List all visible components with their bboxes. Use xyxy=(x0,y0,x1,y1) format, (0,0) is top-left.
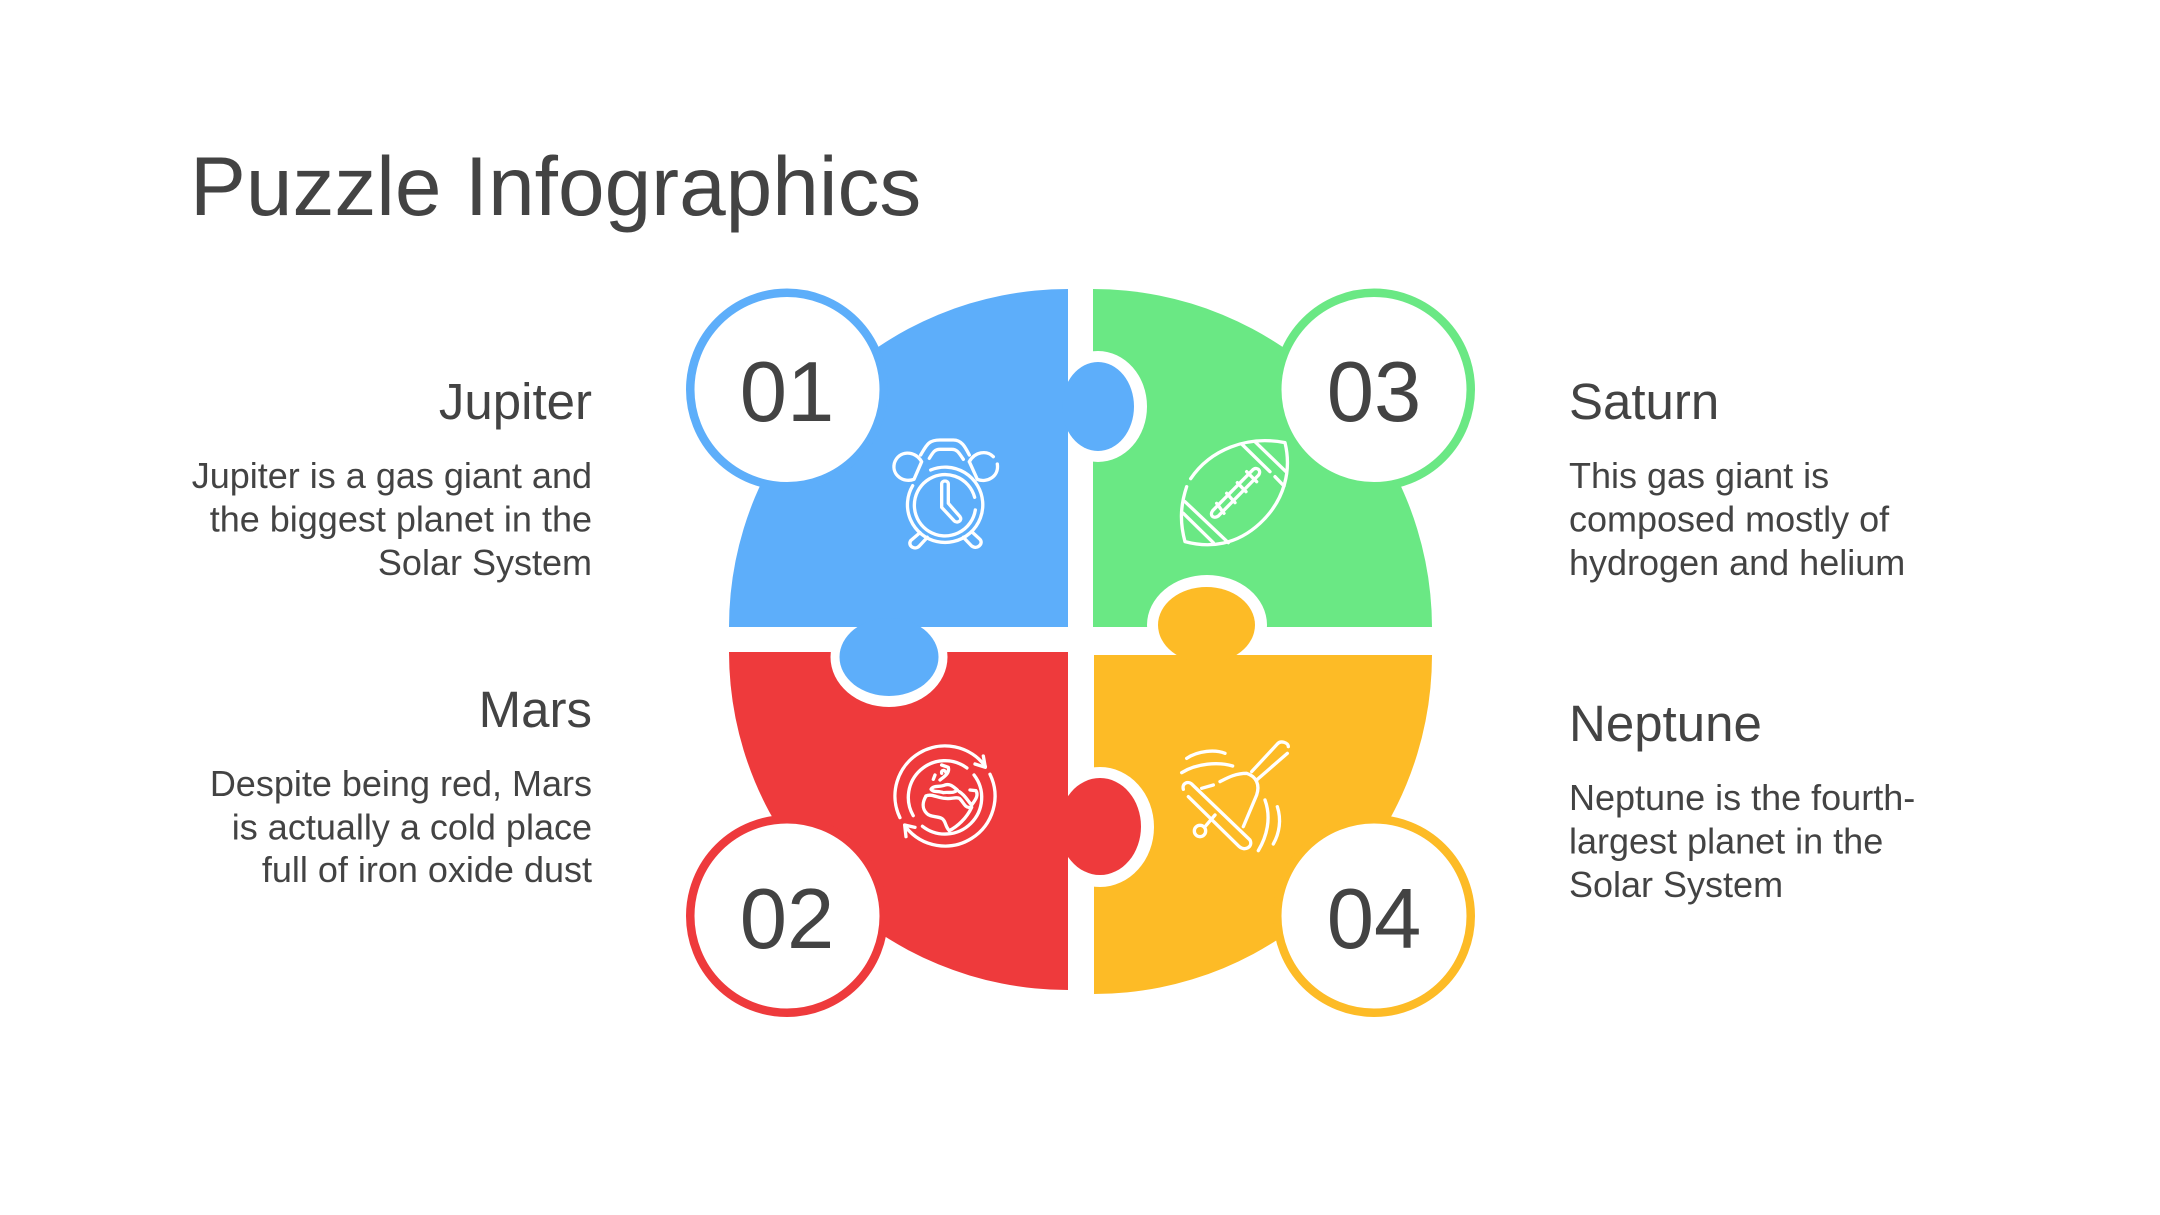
text block: Mars: Despite being red, Mars xyxy=(210,763,592,804)
number badge 03 xyxy=(1277,293,1471,486)
text block: Jupiter: Jupiter xyxy=(439,373,592,430)
number badge 04: 04 xyxy=(1327,872,1421,967)
icon: football xyxy=(1181,441,1287,545)
text block: Mars: full of iron oxide dust xyxy=(262,849,592,890)
text block: Mars: is actually a cold place xyxy=(232,806,592,848)
icon: globe with arrows xyxy=(895,746,995,846)
puzzle diagram xyxy=(690,289,1471,1013)
icon: hand bell xyxy=(1182,742,1288,851)
number badge 04 xyxy=(1277,819,1471,1013)
number badge 02 xyxy=(690,819,884,1013)
text block: Jupiter: Solar System xyxy=(378,542,592,583)
icon: alarm clock xyxy=(894,440,998,548)
piece: green quadrant xyxy=(1049,289,1432,675)
piece: orange quadrant xyxy=(1046,587,1432,994)
text block: Jupiter: the biggest planet in the xyxy=(210,498,592,540)
text block: Saturn: This gas giant is xyxy=(1569,455,1829,496)
text block: Jupiter xyxy=(192,373,592,583)
number badge 01 xyxy=(690,293,884,486)
number badge 02: 02 xyxy=(740,872,834,967)
text block: Saturn: composed mostly of xyxy=(1569,498,1890,540)
text block: Neptune: Neptune xyxy=(1569,695,1762,752)
text block: Neptune: largest planet in the xyxy=(1569,820,1883,862)
text block: Saturn: Saturn xyxy=(1569,373,1719,430)
number badge 01: 01 xyxy=(740,345,834,440)
text block: Saturn xyxy=(1569,373,1905,583)
piece: blue quadrant xyxy=(729,289,1134,696)
piece: red quadrant xyxy=(729,607,1141,990)
text block: Saturn: hydrogen and helium xyxy=(1569,542,1905,583)
text block: Mars: Mars xyxy=(479,681,592,738)
title: Puzzle Infographics xyxy=(190,139,921,233)
text block: Neptune xyxy=(1569,695,1915,905)
text block: Jupiter: Jupiter is a gas giant and xyxy=(192,455,592,496)
text block: Neptune: Neptune is the fourth- xyxy=(1569,777,1915,818)
text block: Mars xyxy=(210,681,592,890)
number badge 03: 03 xyxy=(1327,345,1421,440)
text block: Neptune: Solar System xyxy=(1569,864,1783,905)
